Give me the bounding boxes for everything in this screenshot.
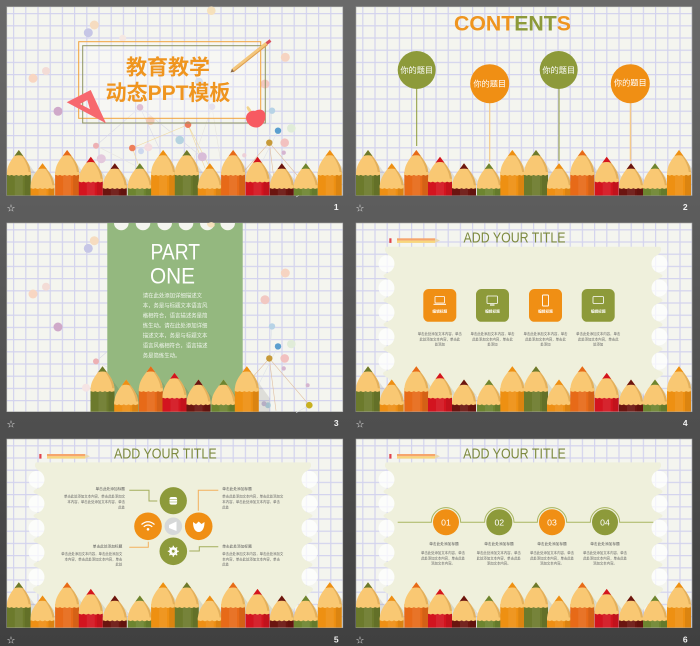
timeline captions: 单击此处添加标题 [429,541,459,546]
section body text: 请在此处添加详细描述文 [143,291,203,299]
petal: wifi [134,512,162,540]
slide 2: contents [356,7,700,214]
timeline captions: 单击此处添加文本内容，单击 [530,550,575,555]
grid paper background [7,223,343,412]
text bottom left: 此处 [116,562,123,567]
pencil row [356,582,700,628]
petal: database [160,487,187,514]
grid paper background [356,439,692,628]
card 1: laptop [423,289,456,322]
timeline captions: 此处添加文本内容，单击此处 [477,556,521,560]
item 3 pin: 你的题目 [542,65,575,75]
text top left: 单击此处添加文本内容，单击此处添加文 [64,494,126,498]
slide 5: petal diagram [6,439,353,646]
grid paper background [356,223,692,412]
cover title: 动态PPT模板 [106,81,230,105]
connectors [129,490,218,551]
text bottom right: 单击此处添加标题 [222,544,252,548]
node 03 [539,509,565,535]
petal: gear [160,538,187,565]
section body text: 语言风格相符合，语言描述 [143,341,208,349]
section body text: 务是简练生动。 [143,351,180,359]
torn paper panel [28,462,318,611]
section body text: 本，务是与标题文本语言风 [143,301,208,309]
item 4 pin [611,64,650,161]
timeline captions [421,541,628,566]
card captions: 单击此处添加文本内容，单击 [470,331,515,336]
icon: small pencil [389,238,440,243]
timeline captions: 单击此处添加文本内容，单击 [421,550,466,555]
node 01 [433,509,459,535]
slide 3: section [6,222,343,430]
item 3 pin [540,51,578,161]
page number: 4 [683,418,688,428]
text bottom right: 单击此处添加文本内容，单击此处添加文 [222,551,284,556]
icon: drawn pencil [230,40,270,72]
page number: 1 [334,202,339,212]
text bottom left: 本内容，单击此处添加文本内容，单击 [65,556,123,561]
text top right [222,486,284,509]
timeline captions: 添加文本内容。 [540,561,564,566]
pencil row [7,150,353,196]
petal: lotus [185,512,212,540]
card captions: 单击此处添加文本内容，单击 [523,331,568,336]
text top right: 单击此处添加标题 [222,486,252,491]
node 04 [592,509,618,535]
timeline captions: 单击此处添加标题 [484,541,514,546]
card 2: monitor [476,289,509,322]
icon: apple [246,106,266,128]
card captions [418,331,621,346]
footer star: ☆ [6,204,16,214]
center megaphone [164,518,182,535]
item 2 pin [470,64,509,162]
card 4: screen: 编辑标题 [591,308,606,314]
text top left: 此处 [118,504,126,509]
timeline captions: 单击此处添加标题 [590,541,620,546]
icon: triangle ruler [67,90,106,123]
section title: ONE [150,263,195,288]
node 02 [486,509,512,535]
page number: 2 [683,202,688,212]
timeline captions: 单击此处添加文本内容，单击 [477,550,521,555]
slide 6: timeline [356,439,700,646]
torn paper panel [378,462,668,611]
title frames [79,42,265,123]
text bottom left [61,544,123,567]
section body text: 格相符合，语言描述务是简 [143,311,207,319]
card 3: phone: 编辑标题 [538,308,553,314]
section title: PART [150,239,200,264]
card captions: 处添加 [487,342,498,346]
section body text [143,291,208,359]
card 1: laptop: 编辑标题 [432,308,447,314]
text top left [64,486,126,509]
card captions: 此处添加文本内容，单击此 [525,336,566,341]
network of bubbles [28,6,313,197]
cover title [106,56,230,105]
timeline captions: 添加文本内容。 [431,561,455,566]
grid paper background [356,7,692,195]
torn paper panel [378,247,668,395]
item 2 pin: 你的题目 [473,78,506,88]
text top left: 本内容，单击此处添加文本内容，单击 [67,499,126,504]
card captions: 单击此处添加文本内容，单击 [418,331,462,336]
icon: small pencil [389,454,440,459]
icon: small pencil [39,454,90,459]
pencil group [90,366,270,412]
card captions: 此处添加文本内容，单击此 [419,336,461,341]
contents heading: CONTENTS [454,12,571,35]
footer star: ☆ [356,420,364,430]
item 4 pin: 你的题目 [614,78,647,88]
slide 4: four cards [356,223,700,430]
text bottom left: 单击此处添加标题 [93,544,123,548]
node 02: 02 [494,518,504,528]
text bottom right: 此处 [222,562,230,567]
timeline captions: 单击此处添加文本内容，单击 [583,550,628,555]
green note panel [107,223,243,412]
card captions: 处添加 [435,342,445,346]
section title [150,239,200,288]
network of bubbles [28,222,313,413]
timeline captions: 添加文本内容。 [593,561,617,566]
card captions: 此处添加文本内容，单击此 [472,336,513,341]
item 1 pin [398,51,436,146]
item 1 pin: 你的题目 [400,65,433,75]
page number: 3 [334,418,339,428]
text top right: 此处 [222,504,230,509]
card captions: 处添加 [540,342,551,346]
text bottom left: 单击此处添加文本内容，单击此处添加文 [61,551,123,556]
node 03: 03 [547,518,557,528]
card captions: 处添加 [593,342,604,346]
cover title: 教育教学 [126,56,210,80]
card captions: 此处添加文本内容，单击此 [578,336,619,341]
slide title: ADD YOUR TITLE [114,445,217,462]
card 4: screen [582,289,615,322]
footer star: ☆ [356,204,364,214]
text top right: 单击此处添加文本内容，单击此处添加文 [222,494,284,498]
grid paper background [7,439,343,628]
text bottom right: 本内容，单击此处添加文本内容，单击 [222,556,281,561]
timeline line with arcs [398,508,653,522]
slide title: ADD YOUR TITLE [463,445,566,462]
page number: 6 [683,634,688,644]
card 2: monitor: 编辑标题 [485,308,500,314]
timeline captions: 此处添加文本内容，单击此处 [421,556,466,560]
card 3: phone [529,289,562,322]
card captions: 单击此处添加文本内容，单击 [576,331,621,336]
pencil row [356,366,700,412]
footer star: ☆ [6,420,16,430]
text bottom right [222,544,284,567]
timeline captions: 添加文本内容。 [487,561,511,566]
section body text: 描述文本，务是与标题文本 [143,331,208,339]
text top right: 本内容，单击此处添加文本内容，单击 [222,499,281,504]
timeline captions: 此处添加文本内容，单击此处 [583,556,628,560]
node 01: 01 [441,518,451,528]
text top left: 单击此处添加标题 [96,486,125,491]
slide 1: cover [6,6,353,215]
page number: 5 [334,634,339,644]
pencil row [7,582,353,628]
timeline captions: 此处添加文本内容，单击此处 [530,556,575,560]
slide title: ADD YOUR TITLE [464,229,566,246]
grid paper background [7,7,343,195]
pencil row [356,150,700,196]
section body text: 练生动。请在此处添加详细 [143,321,207,329]
node 04: 04 [600,518,610,528]
timeline captions: 单击此处添加标题 [537,541,567,546]
